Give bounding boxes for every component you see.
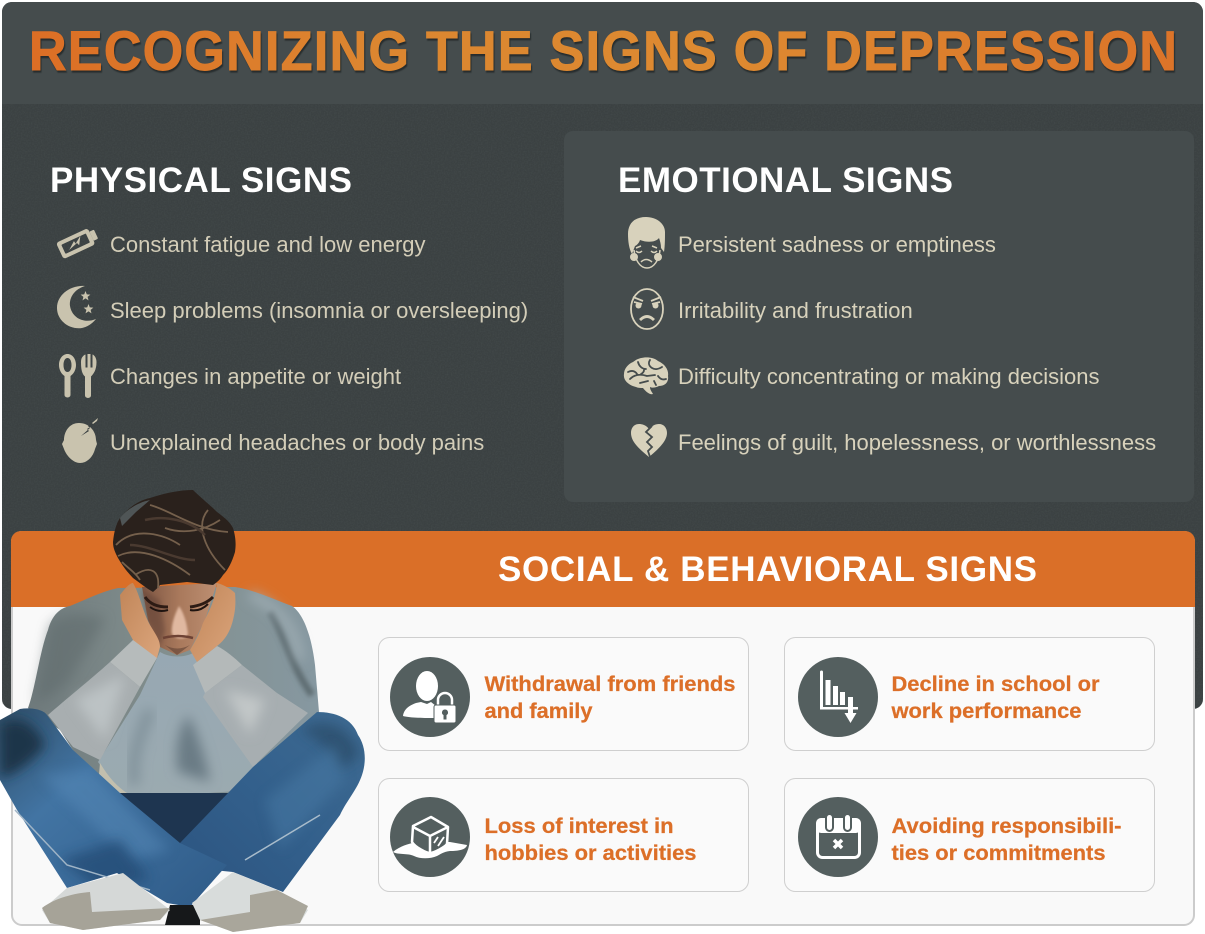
text: sleep: Sleep problems (insomnia or oversleeping) bbox=[110, 298, 528, 323]
icon: head with pain bolt bbox=[62, 418, 99, 463]
hair bbox=[113, 490, 236, 592]
card: withdrawal: and family bbox=[484, 700, 593, 723]
text: sadness: Persistent sadness or emptiness bbox=[678, 232, 996, 257]
illustration: seated man holding his head bbox=[0, 490, 365, 932]
card: decline bbox=[784, 638, 1154, 750]
icon: brain bbox=[624, 357, 668, 394]
text: Withdrawal from friends bbox=[484, 673, 736, 696]
card: loss of interest: hobbies or activities bbox=[484, 842, 696, 865]
icon: moon and stars bbox=[57, 286, 96, 328]
icon: spoon and fork bbox=[59, 354, 96, 398]
shoes bbox=[42, 872, 308, 932]
icon: broken heart bbox=[631, 424, 667, 457]
dark background panel bbox=[2, 2, 1203, 709]
text: Decline in school or bbox=[892, 673, 1100, 696]
heading: physical signs: PHYSICAL SIGNS bbox=[50, 161, 352, 200]
head and hands bbox=[120, 583, 235, 662]
icon: battery bbox=[56, 226, 100, 259]
text: headaches: Unexplained headaches or body pains bbox=[110, 430, 484, 455]
card: withdrawal bbox=[378, 638, 748, 750]
text: fatigue: Constant fatigue and low energy bbox=[110, 232, 426, 257]
card: avoiding responsibilities bbox=[784, 778, 1154, 892]
text: guilt: Feelings of guilt, hopelessness, or worthlessness bbox=[678, 430, 1156, 455]
heading: emotional signs: EMOTIONAL SIGNS bbox=[618, 161, 953, 200]
icon: melting cube bbox=[393, 817, 467, 858]
heading: social and behavioral signs: SOCIAL & BEHAVIORAL SIGNS bbox=[498, 550, 1037, 589]
text: irritability: Irritability and frustration bbox=[678, 298, 913, 323]
text: concentrating: Difficulty concentrating or making decisions bbox=[678, 364, 1099, 389]
card: decline: work performance bbox=[890, 700, 1082, 723]
icon: calendar with x bbox=[816, 814, 861, 858]
text: Avoiding responsibili- bbox=[892, 815, 1122, 838]
icon: sad face bbox=[628, 217, 665, 268]
text: appetite: Changes in appetite or weight bbox=[110, 364, 401, 389]
icon: angry face bbox=[631, 289, 663, 329]
text: Loss of interest in bbox=[484, 815, 674, 838]
panel: emotional signs bbox=[564, 131, 1194, 502]
sweater bbox=[28, 587, 319, 803]
jeans bbox=[0, 708, 365, 907]
card: loss of interest bbox=[378, 778, 748, 892]
icon: person with lock bbox=[403, 671, 456, 723]
card: avoiding responsibilities: ties or commitments bbox=[892, 842, 1106, 865]
panel: social and behavioral signs bbox=[11, 531, 1195, 925]
title banner bbox=[2, 2, 1203, 104]
icon: declining chart bbox=[820, 671, 858, 723]
title: RECOGNIZING THE SIGNS OF DEPRESSION bbox=[29, 20, 1177, 82]
orange header band bbox=[11, 531, 1195, 607]
panel: physical signs bbox=[50, 161, 528, 463]
